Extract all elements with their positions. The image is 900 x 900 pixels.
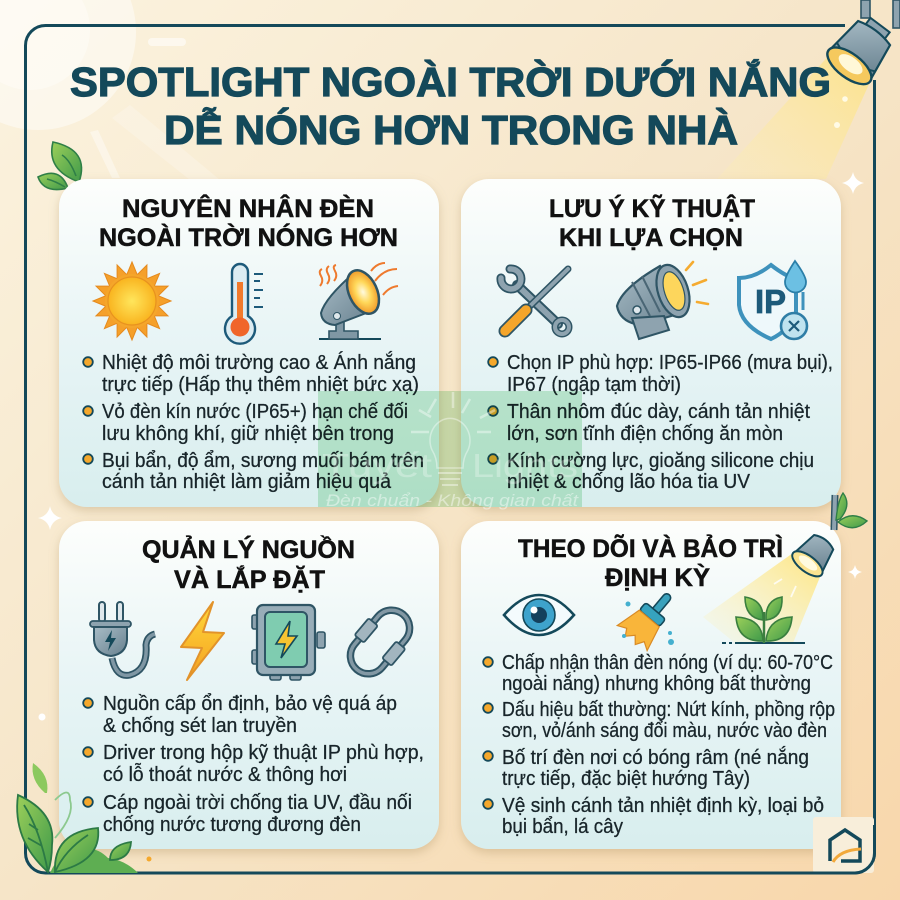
panel: causes xyxy=(59,179,439,507)
list: monitoring and maintenance: Chấp nhận thân đèn nóng (ví dụ: 60-70°C xyxy=(502,652,833,674)
list: monitoring and maintenance: bụi bẩn, lá cây xyxy=(502,816,623,838)
list: technical notes: nhiệt & chống lão hóa tia UV xyxy=(507,471,751,493)
watermark wordmark: Lights xyxy=(472,447,578,484)
panel: power and installation xyxy=(59,521,439,849)
list: technical notes xyxy=(488,352,833,493)
list: causes: trực tiếp (Hấp thụ thêm nhiệt bức xạ) xyxy=(102,374,419,396)
list: technical notes: Kính cường lực, gioăng silicone chịu xyxy=(507,450,814,472)
heading: technical notes: KHI LỰA CHỌN xyxy=(559,224,743,252)
list: power and installation xyxy=(83,693,424,836)
list: technical notes: IP67 (ngập tạm thời) xyxy=(507,374,681,396)
icon: brush sparkles xyxy=(622,602,674,645)
list: monitoring and maintenance: trực tiếp, đặc biệt hướng Tây) xyxy=(502,768,750,790)
list: power and installation: có lỗ thoát nước & thông hơi xyxy=(103,763,347,786)
heading: monitoring and maintenance: THEO DÕI VÀ BẢO TRÌ xyxy=(518,533,783,563)
icon: cable connector xyxy=(338,599,422,685)
accent dots and sparkles xyxy=(38,172,864,862)
icon: eye xyxy=(504,595,574,635)
list: monitoring and maintenance xyxy=(483,652,835,838)
list: monitoring and maintenance: Dấu hiệu bất thường: Nứt kính, phồng rộp xyxy=(502,699,835,721)
background sun glow with rays xyxy=(0,0,220,180)
beam on plant xyxy=(703,553,820,643)
list: causes xyxy=(83,351,424,493)
icon: waterproof box xyxy=(252,605,325,680)
panel: monitoring and maintenance xyxy=(461,521,841,849)
icon: sun xyxy=(93,262,171,340)
list: power and installation: Cáp ngoài trời chống tia UV, đầu nối xyxy=(103,792,412,814)
heading: monitoring and maintenance: ĐỊNH KỲ xyxy=(605,562,710,592)
watermark xyxy=(318,391,582,510)
list: power and installation: Nguồn cấp ổn định, bảo vệ quá áp xyxy=(103,693,397,715)
heading: technical notes xyxy=(549,193,755,252)
watermark tagline: Đèn chuẩn - Không gian chất xyxy=(326,491,579,510)
list: technical notes: lớn, sơn tĩnh điện chống ăn mòn xyxy=(507,423,783,445)
heading: power and installation xyxy=(142,534,355,594)
icon: spotlight xyxy=(617,261,708,339)
list: technical notes: Thân nhôm đúc dày, cánh tản nhiệt xyxy=(507,401,810,423)
list: causes: Vỏ đèn kín nước (IP65+) hạn chế đối xyxy=(102,401,408,423)
list: monitoring and maintenance: sơn, vỏ/ánh sáng đổi màu, nước vào đèn xyxy=(502,720,827,742)
heading: monitoring and maintenance xyxy=(518,533,783,592)
heading: causes xyxy=(99,193,398,252)
list: monitoring and maintenance: Bố trí đèn nơi có bóng râm (né nắng xyxy=(502,746,809,769)
watermark wordmark: Tuyết xyxy=(322,447,432,484)
heading: power and installation: VÀ LẮP ĐẶT xyxy=(174,564,325,594)
icon: lightning bolt xyxy=(181,602,224,680)
list: causes: Nhiệt độ môi trường cao & Ánh nắng xyxy=(102,351,416,374)
heading: causes: NGOÀI TRỜI NÓNG HƠN xyxy=(99,222,398,252)
watermark bulb xyxy=(411,392,495,485)
watermark wordmark xyxy=(322,447,578,484)
monitoring spotlight fixture with leaves xyxy=(774,493,867,597)
list: power and installation: chống nước tương đương đèn xyxy=(103,814,361,836)
icon: plug xyxy=(90,602,155,675)
list: causes: cánh tản nhiệt làm giảm hiệu quả xyxy=(102,471,392,493)
icon: thermometer xyxy=(225,264,263,344)
top spotlight fixture xyxy=(821,0,900,128)
icon: IP shield xyxy=(739,261,807,339)
list: power and installation: Driver trong hộp kỹ thuật IP phù hợp, xyxy=(103,742,424,764)
heading: power and installation: QUẢN LÝ NGUỒN xyxy=(142,534,355,564)
title: SPOTLIGHT NGOÀI TRỜI DƯỚI NẮNG xyxy=(70,59,831,105)
leaves top left xyxy=(38,142,82,190)
heading: technical notes: LƯU Ý KỸ THUẬT xyxy=(549,193,755,223)
icon: plant xyxy=(722,597,805,643)
title xyxy=(70,59,831,153)
list: causes: Bụi bẩn, độ ẩm, sương muối bám trên xyxy=(102,450,424,472)
list: technical notes: Chọn IP phù hợp: IP65-IP66 (mưa bụi), xyxy=(507,352,833,374)
icon: crossed tools xyxy=(501,269,569,334)
list: power and installation: & chống sét lan truyền xyxy=(103,715,297,737)
list: causes: lưu không khí, giữ nhiệt bên trong xyxy=(102,423,394,445)
panel: technical notes xyxy=(461,179,841,507)
list: monitoring and maintenance: Vệ sinh cánh tản nhiệt định kỳ, loại bỏ xyxy=(502,795,824,817)
title: DỄ NÓNG HƠN TRONG NHÀ xyxy=(164,107,738,153)
icon: hot spotlight xyxy=(319,263,398,339)
top spotlight beam xyxy=(717,52,870,179)
list: monitoring and maintenance: ngoài nắng) nhưng không bất thường xyxy=(502,672,811,695)
logo tile with house mark xyxy=(813,817,874,873)
icon: brush xyxy=(615,582,684,653)
icon: IP shield: IP xyxy=(755,283,786,320)
foliage bottom left xyxy=(17,763,138,873)
heading: causes: NGUYÊN NHÂN ĐÈN xyxy=(122,193,374,223)
